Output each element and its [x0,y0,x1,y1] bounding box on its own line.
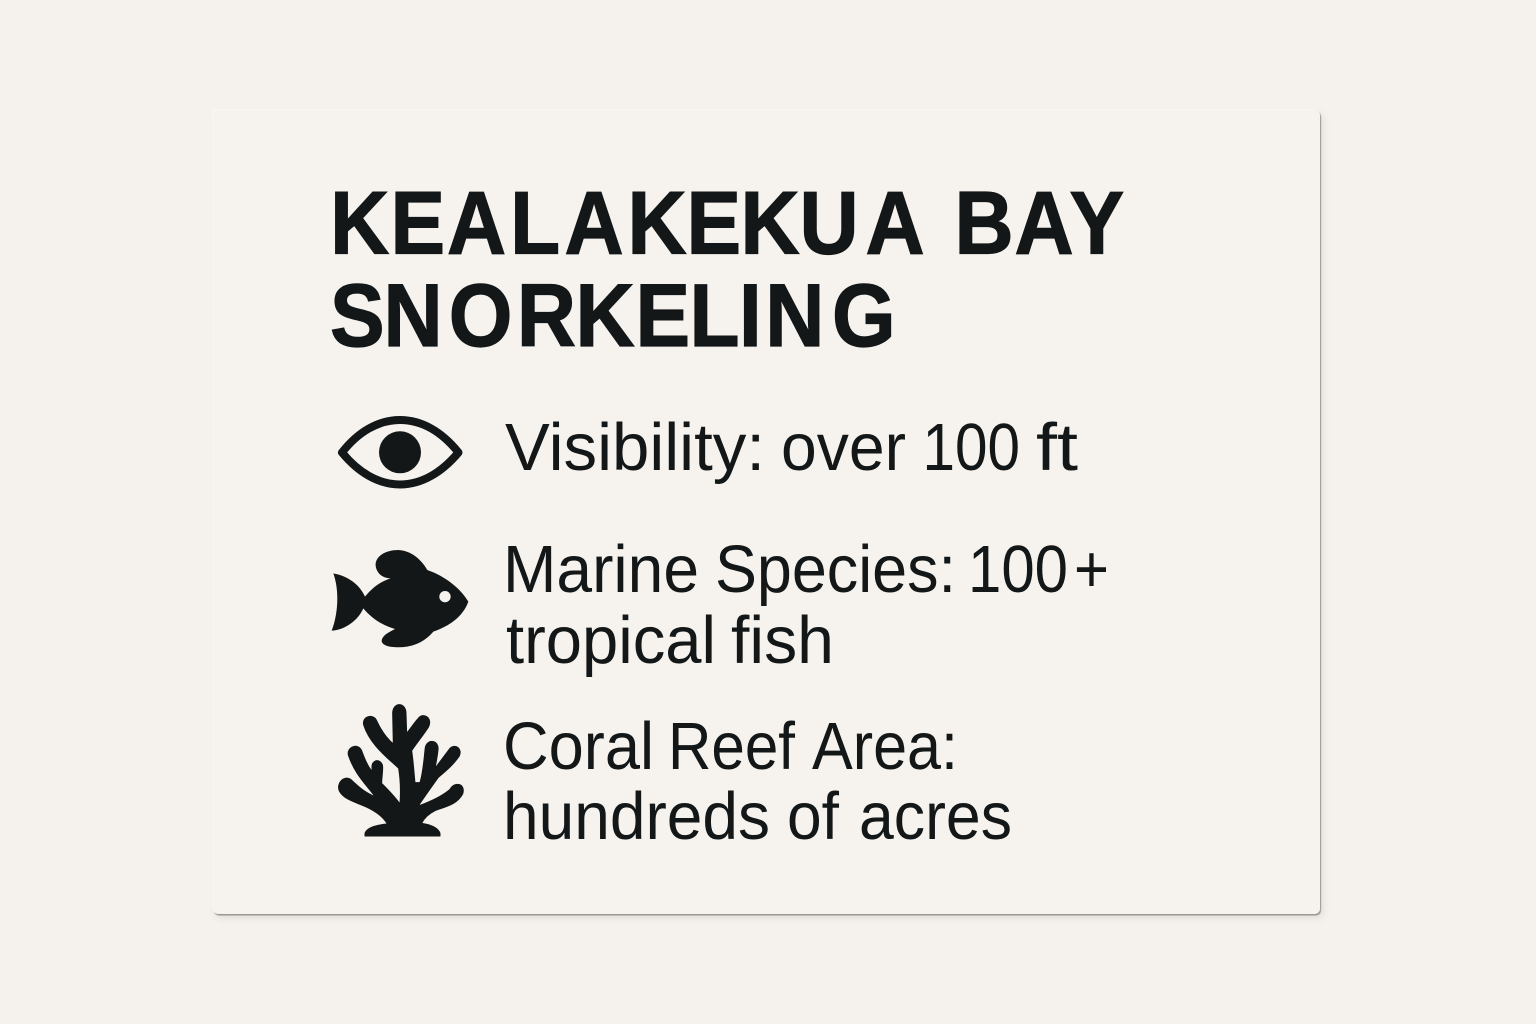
text: coral reef [503,709,1012,854]
text: coral reef: of [787,779,839,854]
title: KEALAKEKUA BAY [330,174,1124,273]
text: visibility: 100 [922,410,1020,485]
text: visibility [505,410,1078,485]
text: coral reef: Area: [812,709,958,784]
title: SNORKELING [330,267,896,366]
icon: coral [339,705,463,836]
text: visibility: over [781,410,906,485]
text: marine species: Marine [503,532,699,607]
text: coral reef: Reef [668,709,795,784]
text: coral reef: acres [859,779,1012,854]
text: coral reef: Coral [503,709,654,784]
icon: eye [342,420,458,484]
text: visibility: ft [1036,410,1078,485]
text: visibility: Visibility: [505,410,765,485]
panel: card [213,110,1320,914]
text: coral reef: hundreds [503,779,770,854]
text: marine species: 100 [968,532,1068,607]
text: marine species: Species: [715,532,956,607]
text: marine species: + [1074,532,1109,607]
text: marine species: fish [731,603,834,678]
title [330,174,1124,366]
text: marine species: tropical [506,603,716,678]
icon: fish [332,550,468,647]
text: marine species [503,532,1109,678]
